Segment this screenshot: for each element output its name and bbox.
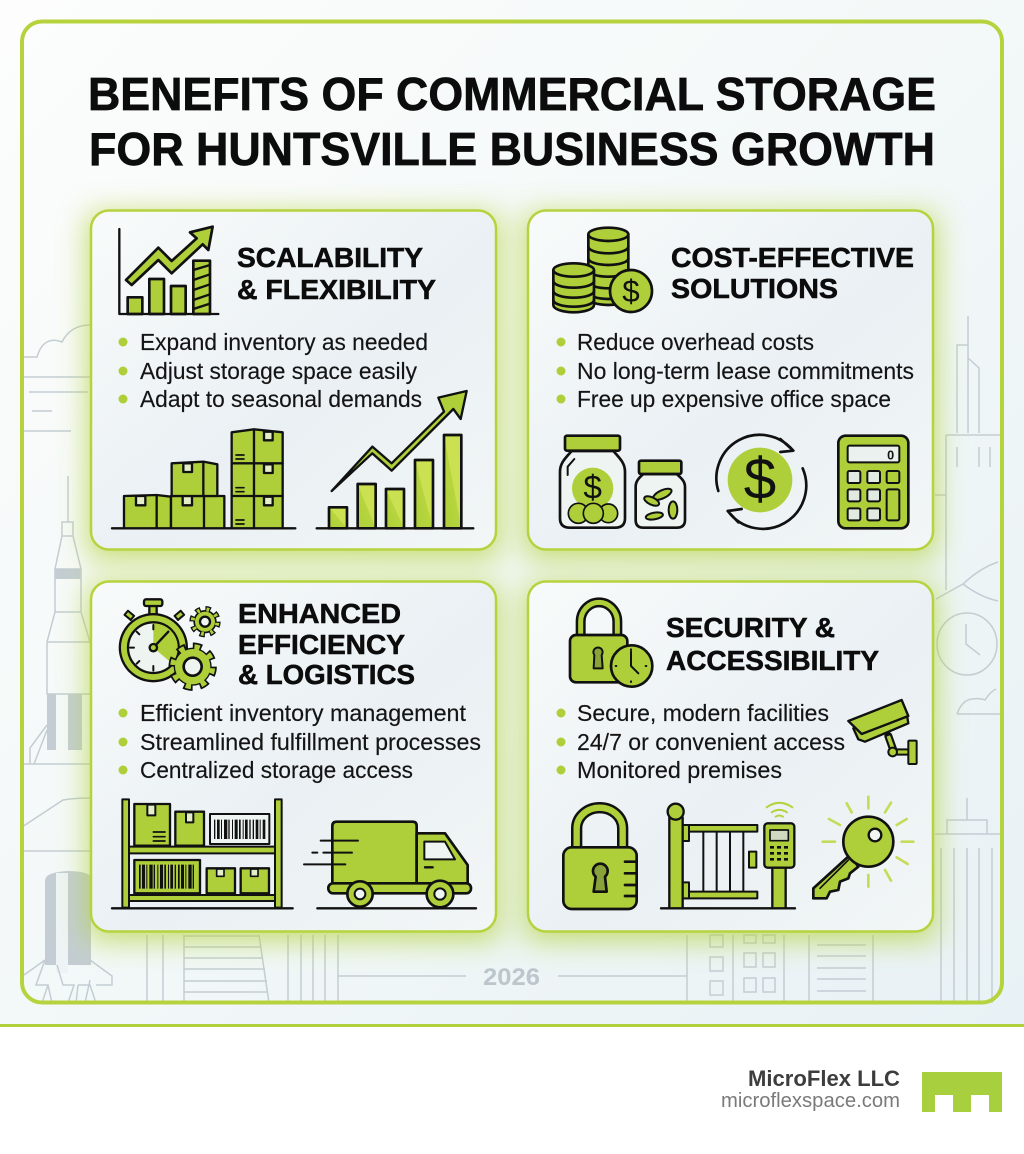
bullet list: cost: Free up expensive office space xyxy=(577,386,891,412)
icon: gate with keypad xyxy=(661,803,795,908)
bullet list: security: 24/7 or convenient access xyxy=(577,729,845,755)
footer divider xyxy=(0,1024,1024,1027)
icon: large padlock xyxy=(563,808,637,909)
heading: efficiency: ENHANCED xyxy=(238,598,401,629)
bullet list: scalability: Adapt to seasonal demands xyxy=(140,386,422,412)
footer brand text: MicroFlex LLC xyxy=(748,1066,900,1091)
bullet list: cost: No long-term lease commitments xyxy=(577,358,914,384)
heading: scalability: SCALABILITY xyxy=(237,242,423,273)
icon: calculator: 0 xyxy=(887,449,894,463)
heading: security xyxy=(666,612,879,676)
icon: savings jars xyxy=(560,436,685,528)
bullet list: efficiency xyxy=(118,700,481,783)
card glows xyxy=(88,214,936,940)
bullet list: security: Monitored premises xyxy=(577,757,782,783)
panel: cost-effective solutions xyxy=(528,210,933,550)
heading: efficiency xyxy=(238,598,415,690)
icon: stopwatch and gears xyxy=(119,599,217,687)
icon: savings jars: $ xyxy=(583,470,602,507)
icon: rising bars with arrow xyxy=(317,391,473,528)
icon: padlock with clock xyxy=(570,602,652,687)
icon: stacked boxes xyxy=(112,429,295,528)
icon: calculator xyxy=(838,436,908,528)
icon: warehouse shelving xyxy=(112,799,293,908)
icon: coin stacks xyxy=(553,228,652,312)
title: FOR HUNTSVILLE BUSINESS GROWTH xyxy=(89,123,935,175)
bullet list: scalability: Adjust storage space easily xyxy=(140,358,417,384)
footer background xyxy=(0,1027,1024,1154)
icon: coin stacks: $ xyxy=(622,274,640,309)
bullet list: efficiency: Efficient inventory management xyxy=(140,700,467,726)
bullet list: scalability: Expand inventory as needed xyxy=(140,329,428,355)
panel: security and accessibility xyxy=(528,582,933,932)
icon: security camera xyxy=(848,700,917,764)
heading: scalability: & FLEXIBILITY xyxy=(237,274,436,305)
icon: dollar cycle xyxy=(716,435,806,529)
bullet list: cost: Reduce overhead costs xyxy=(577,329,814,355)
icon: delivery truck xyxy=(304,822,476,908)
bullet list: security: Secure, modern facilities xyxy=(577,700,829,726)
heading: cost-effective xyxy=(671,242,914,304)
bullet list: cost xyxy=(556,329,914,412)
heading: security: SECURITY & xyxy=(666,612,835,643)
bullet list: security xyxy=(556,700,845,783)
title: BENEFITS OF COMMERCIAL STORAGE xyxy=(88,68,936,120)
panel: enhanced efficiency and logistics xyxy=(91,582,496,932)
logo xyxy=(922,1072,1002,1112)
footer brand text: microflexspace.com xyxy=(721,1090,900,1112)
heading: efficiency: & LOGISTICS xyxy=(238,659,415,690)
bullet list: efficiency: Centralized storage access xyxy=(140,757,413,783)
year label: 2026 xyxy=(483,964,540,991)
icon: dollar cycle: $ xyxy=(744,446,776,511)
background illustration: Huntsville skyline and rockets xyxy=(22,316,1000,1003)
bullet list: scalability xyxy=(118,329,428,412)
title xyxy=(88,68,936,175)
heading: efficiency: EFFICIENCY xyxy=(238,629,405,660)
heading: cost-effective: COST-EFFECTIVE xyxy=(671,242,914,273)
footer brand text xyxy=(721,1066,900,1112)
panel: scalability and flexibility xyxy=(91,210,496,550)
heading: cost-effective: SOLUTIONS xyxy=(671,273,838,304)
heading: scalability xyxy=(237,242,436,305)
bullet list: efficiency: Streamlined fulfillment processes xyxy=(140,729,481,755)
heading: security: ACCESSIBILITY xyxy=(666,645,879,676)
icon: growth chart with arrow xyxy=(119,227,218,314)
icon: shining key xyxy=(813,797,913,898)
